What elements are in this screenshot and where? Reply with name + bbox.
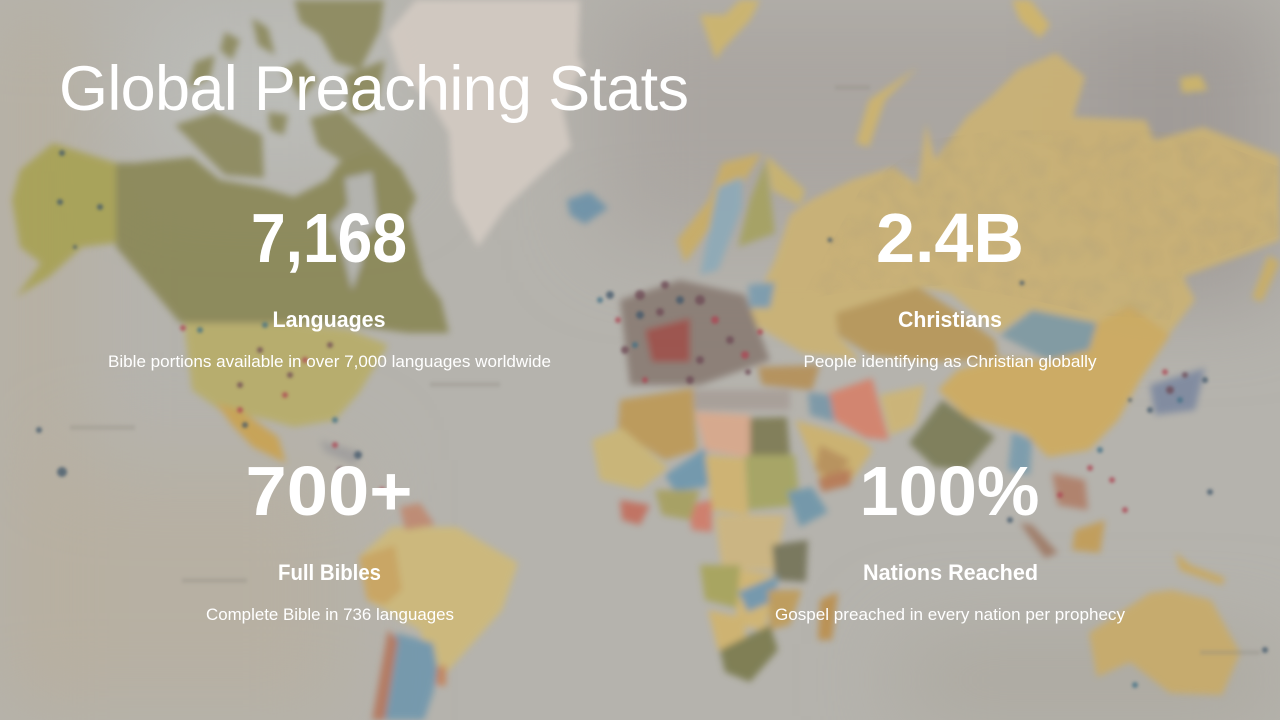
map: kamchatka and japan bbox=[1252, 255, 1280, 302]
map: pin clusters bbox=[36, 150, 1268, 688]
number: 7,168 bbox=[251, 199, 407, 277]
map: kazakhstan bbox=[836, 287, 999, 362]
map: cuba bbox=[320, 440, 360, 465]
map: australia bbox=[1089, 590, 1240, 695]
number: 2.4B bbox=[876, 199, 1024, 277]
number: 100% bbox=[860, 452, 1040, 530]
map: arabia bbox=[795, 420, 873, 480]
map: china bbox=[938, 305, 1170, 457]
map: faint ocean labels bbox=[70, 85, 1260, 655]
stat: nations reached bbox=[775, 452, 1126, 624]
map: alaska bbox=[12, 143, 116, 297]
map: europe bbox=[620, 280, 770, 385]
title: Global Preaching Stats bbox=[59, 54, 689, 124]
description: People identifying as Christian globally bbox=[804, 353, 1097, 371]
map: iceland bbox=[567, 192, 608, 224]
label: Full Bibles bbox=[278, 560, 381, 585]
map: southeast asia bbox=[1052, 473, 1088, 510]
map: south america bbox=[359, 527, 518, 680]
map: iran bbox=[824, 378, 889, 440]
map: svalbard and arctic gold fragments bbox=[700, 0, 760, 60]
label: Languages bbox=[272, 307, 386, 332]
map: turkey bbox=[758, 365, 820, 390]
map: canada bbox=[116, 150, 449, 333]
description: Bible portions available in over 7,000 languages worldwide bbox=[108, 353, 551, 371]
label: Christians bbox=[898, 307, 1002, 332]
map: land mottling bbox=[800, 130, 1280, 330]
description: Gospel preached in every nation per prophecy bbox=[775, 606, 1126, 624]
description: Complete Bible in 736 languages bbox=[206, 606, 454, 624]
map: africa bbox=[618, 388, 697, 460]
map: arctic islands bbox=[175, 0, 416, 218]
map: hudson bay bbox=[330, 172, 378, 290]
map: usa bbox=[184, 323, 388, 427]
stat: christians bbox=[804, 199, 1097, 371]
map: mongolia bbox=[1000, 310, 1097, 360]
map: finland bbox=[738, 160, 775, 247]
number: 700+ bbox=[246, 452, 412, 530]
stat: languages bbox=[108, 199, 551, 371]
stat: full bibles bbox=[206, 452, 454, 624]
map: greenland bbox=[388, 0, 583, 247]
map: norway bbox=[677, 153, 762, 263]
label: Nations Reached bbox=[863, 560, 1038, 585]
map: russia bbox=[746, 53, 1280, 360]
map: india bbox=[909, 400, 995, 470]
map: mexico bbox=[216, 403, 286, 463]
map: sweden bbox=[700, 177, 742, 275]
